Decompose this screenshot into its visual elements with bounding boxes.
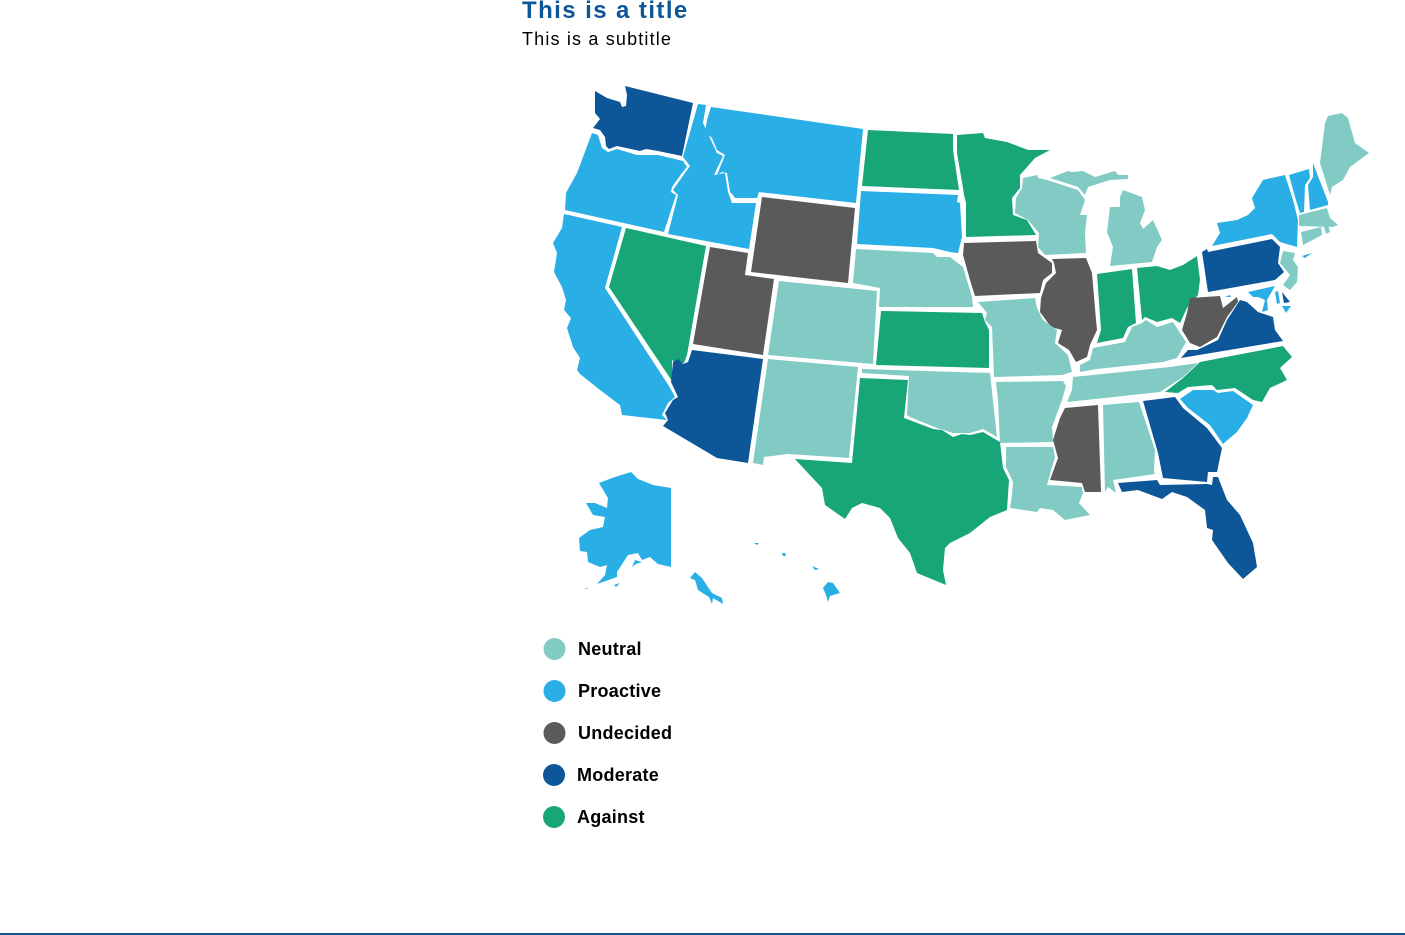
state: New York <box>1212 175 1298 247</box>
legend item: Against: Against <box>577 807 645 827</box>
state: North Carolina <box>1165 346 1292 402</box>
state: Maine <box>1320 113 1369 195</box>
state: West Virginia <box>1182 296 1238 347</box>
state: Florida <box>1118 477 1257 579</box>
state: Maryland <box>1225 286 1291 313</box>
state: Alaska <box>579 472 723 604</box>
state: Arkansas <box>996 381 1066 443</box>
state: Ohio <box>1137 256 1200 323</box>
legend item: Neutral <box>544 638 642 660</box>
state: Tennessee <box>1067 363 1198 402</box>
legend item: Moderate: Moderate <box>577 765 659 785</box>
state: Indiana <box>1097 269 1136 343</box>
state: Arizona <box>663 350 763 463</box>
state: Nebraska <box>853 249 973 307</box>
state: Washington <box>593 86 693 156</box>
map: US states <box>553 86 1369 604</box>
state: Montana <box>705 107 863 203</box>
state: Connecticut <box>1301 227 1322 245</box>
state: Mississippi <box>1050 405 1101 492</box>
legend item: Against <box>543 806 645 828</box>
legend <box>543 638 672 828</box>
state: Oklahoma <box>862 369 997 437</box>
state: North Dakota <box>862 130 959 190</box>
state: Texas <box>795 378 1009 585</box>
legend item: Proactive <box>544 680 661 702</box>
state: Idaho <box>668 104 756 249</box>
subtitle: This is a subtitle <box>522 29 672 49</box>
state: Georgia <box>1143 397 1222 482</box>
state: Vermont <box>1289 169 1310 213</box>
state: Nevada <box>609 228 706 381</box>
state: Wyoming <box>751 197 855 283</box>
state: Virginia <box>1181 300 1283 358</box>
state: Colorado <box>768 281 877 364</box>
state: Illinois <box>1040 258 1097 362</box>
state: Louisiana <box>1006 447 1090 520</box>
state: Utah <box>693 247 774 355</box>
state: Alabama <box>1103 402 1155 493</box>
state: Hawaii <box>754 543 840 602</box>
state: South Carolina <box>1180 390 1253 444</box>
state: Kansas <box>876 311 989 368</box>
state: Wisconsin <box>1015 175 1087 255</box>
state: Long Island <box>1302 253 1312 258</box>
state: New Mexico <box>753 359 858 465</box>
state: Pennsylvania <box>1202 239 1284 292</box>
state: Oregon <box>565 133 687 232</box>
state: South Dakota <box>857 191 962 253</box>
state: Iowa <box>963 241 1052 296</box>
state: Kentucky <box>1080 320 1186 372</box>
state: Michigan upper peninsula <box>1050 171 1128 195</box>
state: Delaware <box>1282 292 1290 303</box>
legend item: Moderate <box>543 764 659 786</box>
state: Minnesota <box>957 133 1050 237</box>
state: New Hampshire <box>1308 163 1328 210</box>
legend item: Proactive: Proactive <box>578 681 661 701</box>
legend item: Neutral: Neutral <box>578 639 642 659</box>
state: Missouri <box>978 298 1072 377</box>
legend item: Undecided <box>544 722 672 744</box>
state: California <box>553 214 675 420</box>
state: New Jersey <box>1280 251 1298 290</box>
state: Rhode Island <box>1324 225 1330 234</box>
state: Massachusetts <box>1299 208 1338 227</box>
state: Michigan lower peninsula <box>1107 190 1162 266</box>
legend item: Undecided: Undecided <box>578 723 672 743</box>
